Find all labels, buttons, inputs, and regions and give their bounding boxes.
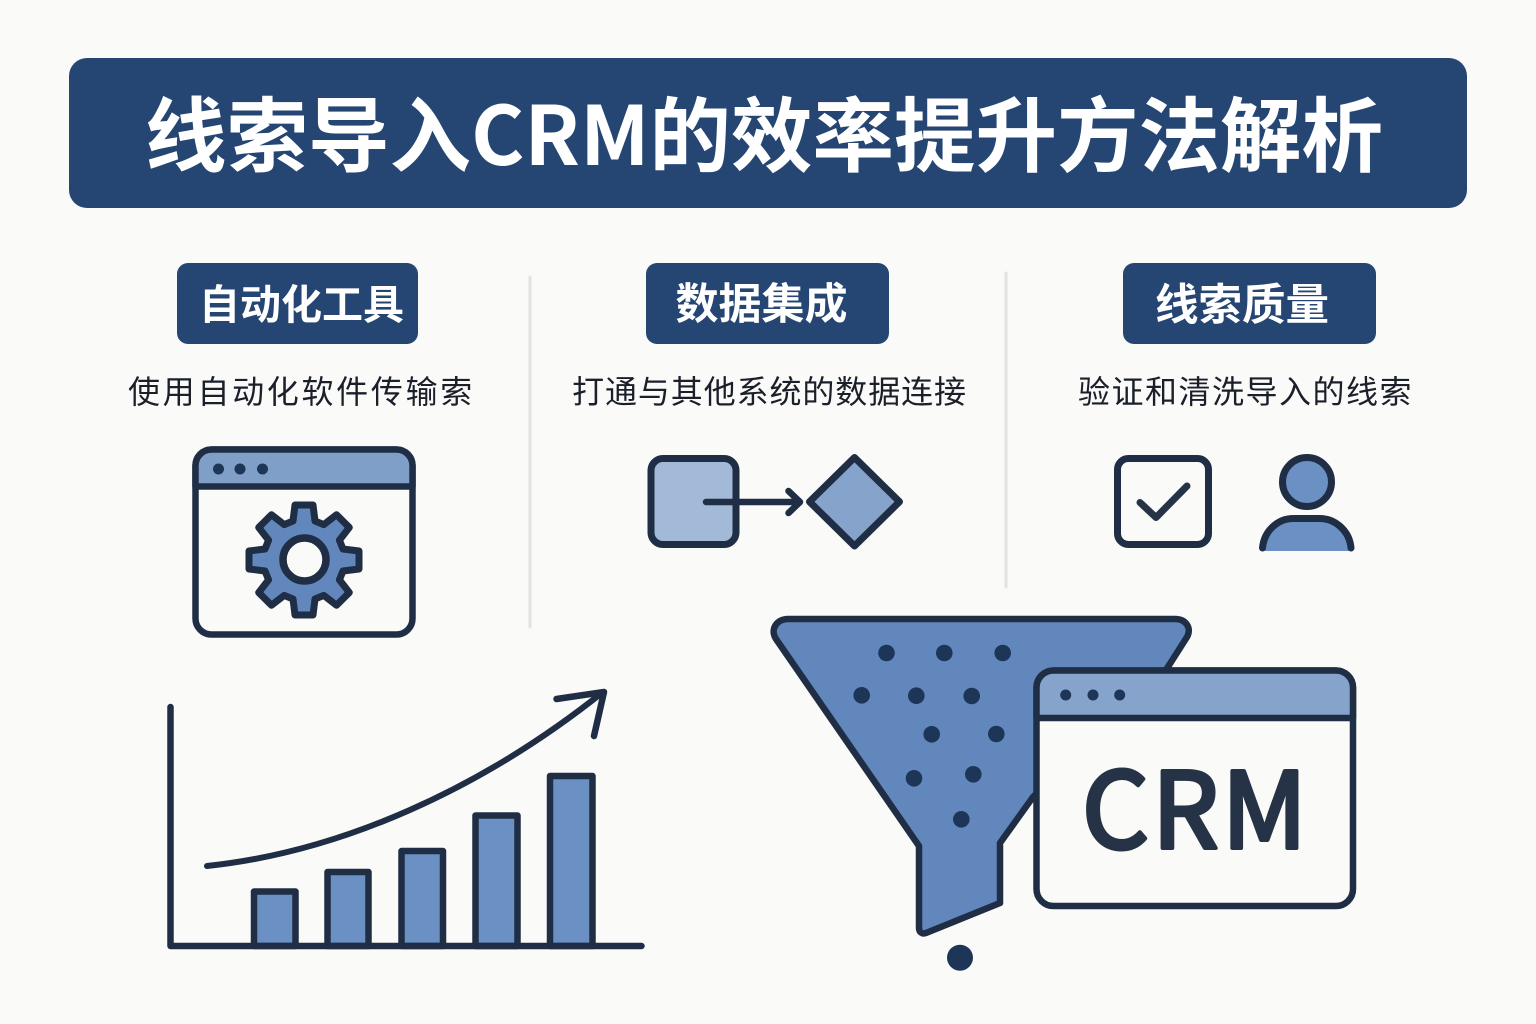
heading: automation tools: 自动化工具	[199, 271, 404, 331]
icon: checkbox	[1118, 458, 1208, 544]
heading: data integration: 数据集成	[676, 270, 848, 332]
icon: funnel with lead dots	[774, 619, 1189, 971]
title banner	[69, 58, 1467, 208]
heading: data integration	[646, 263, 889, 344]
icon: software window with gear	[196, 450, 412, 634]
title banner: 线索导入CRM的效率提升方法解析	[145, 71, 1383, 189]
icon: box connected to diamond	[651, 458, 900, 546]
text: automation description: 使用自动化软件传输索	[128, 367, 475, 413]
label: CRM: CRM	[1082, 727, 1310, 879]
chart: rising bars with growth arrow	[170, 692, 642, 946]
heading: lead quality	[1123, 263, 1376, 344]
text: integration description: 打通与其他系统的数据连接	[572, 367, 967, 413]
heading: lead quality: 线索质量	[1155, 270, 1329, 333]
heading: automation tools	[177, 263, 418, 344]
icon: person	[1262, 458, 1351, 551]
text: quality description: 验证和清洗导入的线索	[1078, 367, 1413, 413]
icon: CRM window	[1036, 670, 1353, 906]
